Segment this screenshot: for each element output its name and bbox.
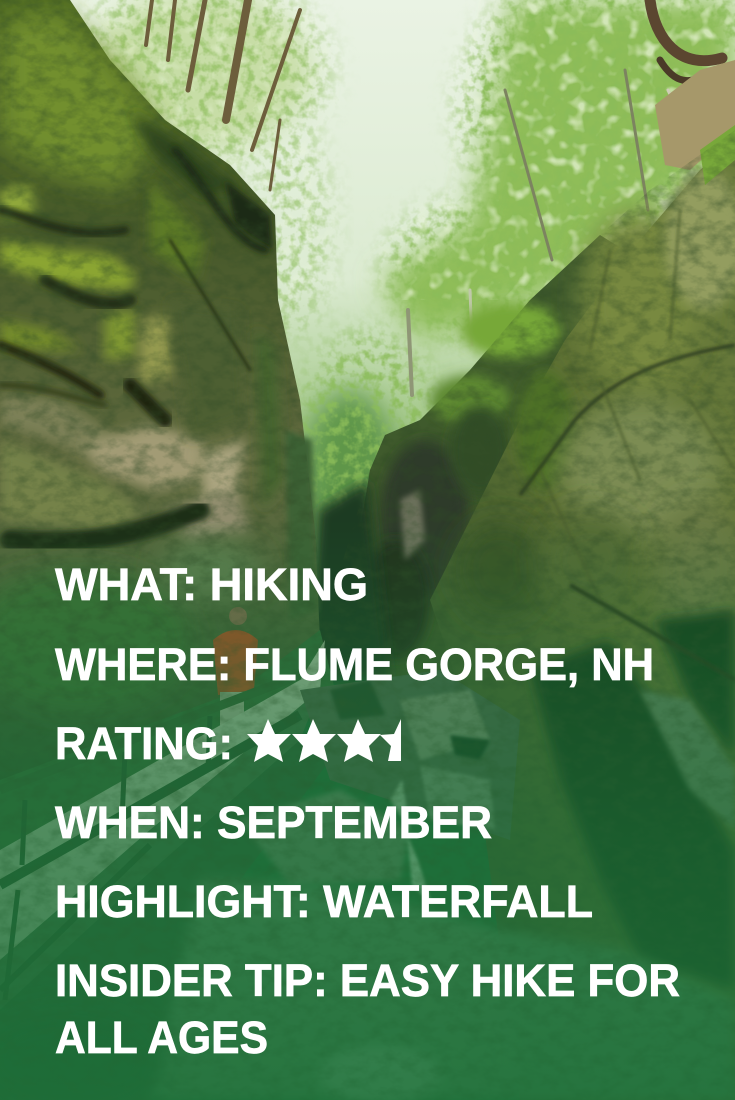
gorge shadow centre bbox=[305, 480, 390, 680]
line: highlight: HIGHLIGHT: WATERFALL bbox=[55, 876, 593, 927]
left canyon wall bbox=[0, 0, 335, 860]
boardwalk bbox=[0, 640, 325, 1010]
hiker in orange shirt bbox=[213, 607, 258, 732]
line: insider tip: INSIDER TIP: EASY HIKE FOR bbox=[55, 955, 680, 1006]
rock outcrop top right bbox=[655, 60, 735, 170]
ledge shadows bbox=[0, 150, 265, 542]
line: what: WHAT: HIKING bbox=[55, 559, 368, 610]
green gradient overlay bbox=[0, 520, 735, 1100]
moss ledges bbox=[0, 10, 272, 385]
line: insider tip continued: ALL AGES bbox=[55, 1012, 268, 1063]
streambed boulders bbox=[0, 670, 735, 1100]
label: rating: RATING: bbox=[55, 718, 233, 769]
dark diagonal rock band bbox=[530, 640, 735, 990]
far right-side rocks bbox=[355, 235, 640, 700]
line: where: WHERE: FLUME GORGE, NH bbox=[55, 639, 654, 690]
rating row bbox=[55, 718, 401, 769]
right canyon wall bbox=[430, 125, 735, 1100]
line: when: WHEN: SEPTEMBER bbox=[55, 797, 492, 848]
icon: 3.5 stars bbox=[247, 719, 401, 762]
sandstone blocks bbox=[0, 300, 318, 620]
tree trunks bbox=[146, 0, 722, 395]
sky and forest backdrop bbox=[70, 0, 735, 574]
detail list bbox=[55, 559, 680, 1063]
